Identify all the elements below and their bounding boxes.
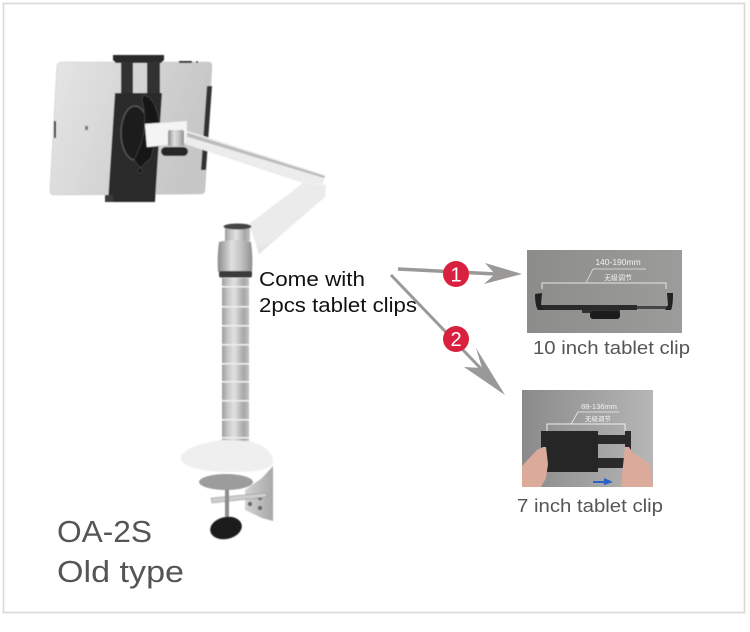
badge 2: 2 [450, 329, 462, 351]
arrow 1 [398, 263, 522, 284]
model name [57, 514, 184, 589]
callout text: 2pcs tablet clips [259, 295, 417, 317]
badge 1: 1 [450, 264, 462, 286]
pole collar [218, 224, 252, 278]
photo: 7 inch tablet clip: 88-136mm [581, 402, 617, 411]
base plate [181, 440, 273, 472]
photo: 10 inch tablet clip: 无级调节 [604, 273, 632, 282]
product photo: desk arm tablet stand [50, 55, 326, 542]
photo: 7 inch tablet clip [522, 390, 653, 487]
tablet clip holder [105, 55, 164, 202]
arrow 2 [391, 275, 505, 395]
badge 1 [443, 261, 469, 287]
callout text [259, 269, 417, 317]
photo: 7 inch tablet clip: 无级调节 [585, 414, 612, 423]
arm bracket and knob [145, 121, 188, 156]
pole [222, 278, 249, 452]
photo: 10 inch tablet clip: 140-190mm [595, 257, 641, 267]
label: 10 inch tablet clip: 10 inch tablet clip [533, 338, 690, 358]
tablet [50, 61, 212, 195]
callout text: Come with [259, 269, 365, 291]
model name: OA-2S [57, 514, 152, 549]
upper arm [185, 130, 325, 184]
label: 7 inch tablet clip: 7 inch tablet clip [517, 496, 663, 516]
photo: 10 inch tablet clip [527, 250, 682, 333]
model name: Old type [57, 554, 184, 589]
lower arm [249, 183, 326, 254]
clamp bracket [199, 466, 273, 542]
badge 2 [443, 326, 469, 352]
